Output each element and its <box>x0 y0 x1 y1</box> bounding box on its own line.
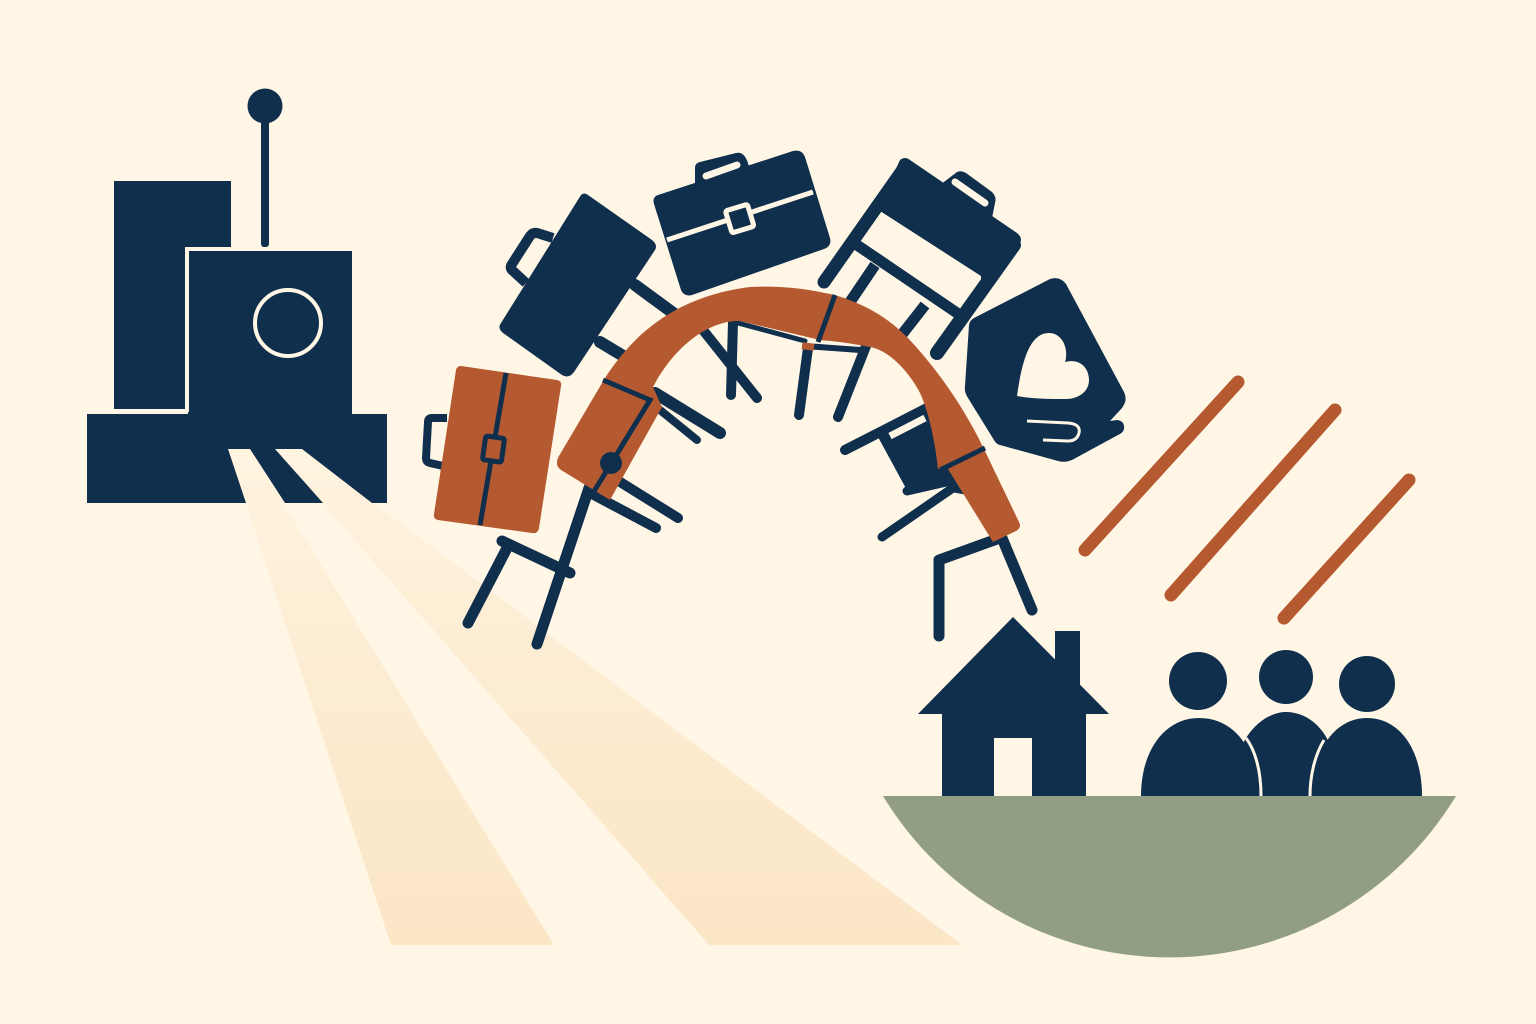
suitcase: navy top <box>654 151 830 295</box>
light beam: left <box>228 449 554 945</box>
front block outline <box>185 247 356 415</box>
arc buckle <box>600 452 622 474</box>
orange arc <box>557 287 1020 542</box>
arc strap left <box>593 380 650 493</box>
antenna <box>248 88 282 247</box>
chairs <box>468 285 1032 644</box>
base with beam openings <box>87 412 387 503</box>
suitcase: navy left <box>499 194 656 376</box>
diagonal lines <box>1085 382 1409 618</box>
small orange tab <box>802 342 814 351</box>
factory building <box>87 88 387 503</box>
icon: heart in hand <box>965 278 1126 462</box>
people <box>1141 650 1422 796</box>
front block fill <box>189 251 352 417</box>
suitcase: orange <box>426 366 561 533</box>
chair: top under arc <box>703 322 866 417</box>
house <box>918 617 1109 796</box>
chair legs: under first suitcase <box>600 285 720 440</box>
arc seam top <box>818 295 835 342</box>
chair: bottom right <box>939 538 1032 636</box>
suitcase-chair: navy right <box>824 158 1021 353</box>
light beam: right <box>275 449 962 945</box>
bowl <box>883 796 1456 957</box>
chair legs: under lower arc <box>590 480 678 528</box>
person: right <box>1310 656 1422 796</box>
chair: right lower <box>845 408 965 537</box>
arc seam right <box>940 448 985 470</box>
person: middle <box>1240 650 1330 796</box>
person: left <box>1141 652 1261 796</box>
back block <box>114 181 231 409</box>
chair: bottom left <box>468 488 589 644</box>
porthole <box>255 290 321 356</box>
